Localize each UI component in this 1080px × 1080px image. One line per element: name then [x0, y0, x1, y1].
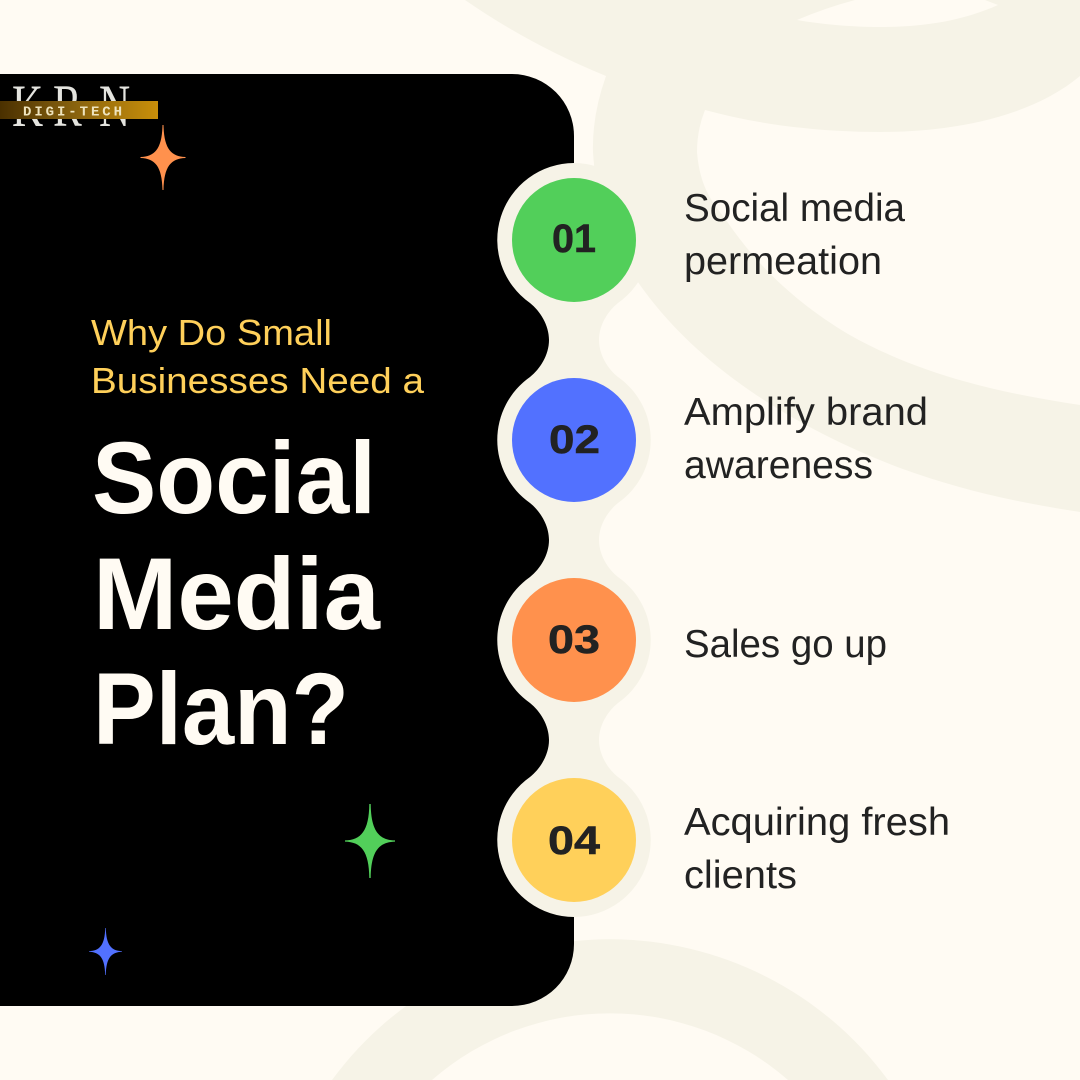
background ring: bottom [332, 939, 888, 1080]
label 01: permeation [684, 240, 882, 283]
label 02: awareness [684, 444, 873, 487]
heading: title: Plan? [93, 652, 349, 766]
logo tagline: DIGI-TECH [23, 104, 122, 120]
label 04: Acquiring fresh [684, 801, 950, 844]
icon: green sparkle [345, 804, 395, 878]
label 03: Sales go up [684, 623, 887, 666]
badge 01: 01 [552, 217, 596, 261]
badge 04 [512, 778, 636, 902]
label 02: Amplify brand [684, 391, 928, 434]
logo wordmark: KRN [12, 73, 130, 140]
scalloped connector band [497, 163, 651, 917]
badge 03: 03 [548, 618, 600, 662]
logo: KRN Digi-Tech [0, 73, 158, 140]
label 04: clients [684, 854, 797, 897]
heading: subtitle: Why Do Small [91, 312, 332, 353]
label 02 [684, 391, 928, 487]
label 04 [684, 801, 950, 897]
item 03 [512, 578, 887, 702]
label 01 [684, 187, 906, 283]
heading: title: Media [93, 537, 381, 651]
item 04 [512, 778, 950, 902]
icon: orange sparkle [140, 125, 186, 190]
badge 01 [512, 178, 636, 302]
badge 02: 02 [549, 418, 600, 462]
logo gold bar [0, 101, 158, 119]
icon: blue sparkle [89, 928, 122, 975]
badge 04: 04 [548, 819, 601, 863]
heading: subtitle: Businesses Need a [91, 360, 425, 401]
label 01: Social media [684, 187, 906, 230]
badge 03 [512, 578, 636, 702]
heading: title: Social [92, 421, 376, 535]
heading: subtitle [91, 312, 425, 401]
item 02 [512, 378, 928, 502]
black panel [0, 74, 574, 1006]
item 01 [512, 178, 906, 302]
badge 02 [512, 378, 636, 502]
heading: title [92, 421, 381, 766]
background swirl: top right [465, 0, 1080, 512]
